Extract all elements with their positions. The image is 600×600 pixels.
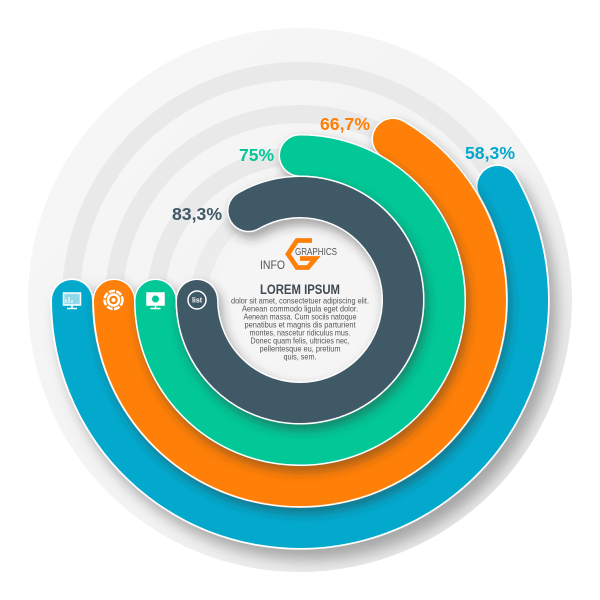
body text: pellentesque eu, pretium: [260, 344, 341, 354]
ring: blue 58,3%: [72, 186, 535, 538]
body text: [231, 296, 369, 362]
icon: target with arrows: [104, 291, 122, 309]
ring: dark slate 83,3%: [197, 197, 406, 409]
icon: circled list: list: [192, 298, 203, 304]
label: 58,3%: 58,3%: [465, 143, 515, 163]
label: 83,3%: 83,3%: [172, 204, 222, 224]
logo hexagon G: [288, 240, 316, 268]
body text: montes, nascetur ridiculus mus.: [250, 328, 350, 338]
icon: monitor with chart: [64, 293, 80, 308]
label: 75%: 75%: [239, 145, 274, 165]
center circle: [216, 216, 384, 384]
body text: Aenean commodo ligula eget dolor.: [242, 304, 358, 314]
label: 66,7%: 66,7%: [320, 114, 370, 134]
body text: quis, sem.: [284, 352, 316, 362]
body text: dolor sit amet, consectetuer adipiscing elit.: [231, 296, 369, 306]
ring: orange 66,7%: [114, 139, 489, 492]
icon: monitor with pie: [147, 293, 164, 308]
body text: Donec quam felis, ultricies nec,: [250, 336, 350, 346]
ring: green 75%: [156, 156, 448, 450]
logo: info graphics: GRAPHICS: [295, 246, 337, 258]
body text: Aenean massa. Cum sociis natoque: [244, 312, 357, 322]
logo: info graphics: [260, 240, 337, 272]
icon: circled list: [188, 291, 206, 309]
body text: penatibus et magnis dis parturient: [244, 320, 356, 330]
logo: info graphics: INFO: [260, 258, 285, 272]
heading: lorem ipsum: LOREM IPSUM: [260, 282, 340, 297]
